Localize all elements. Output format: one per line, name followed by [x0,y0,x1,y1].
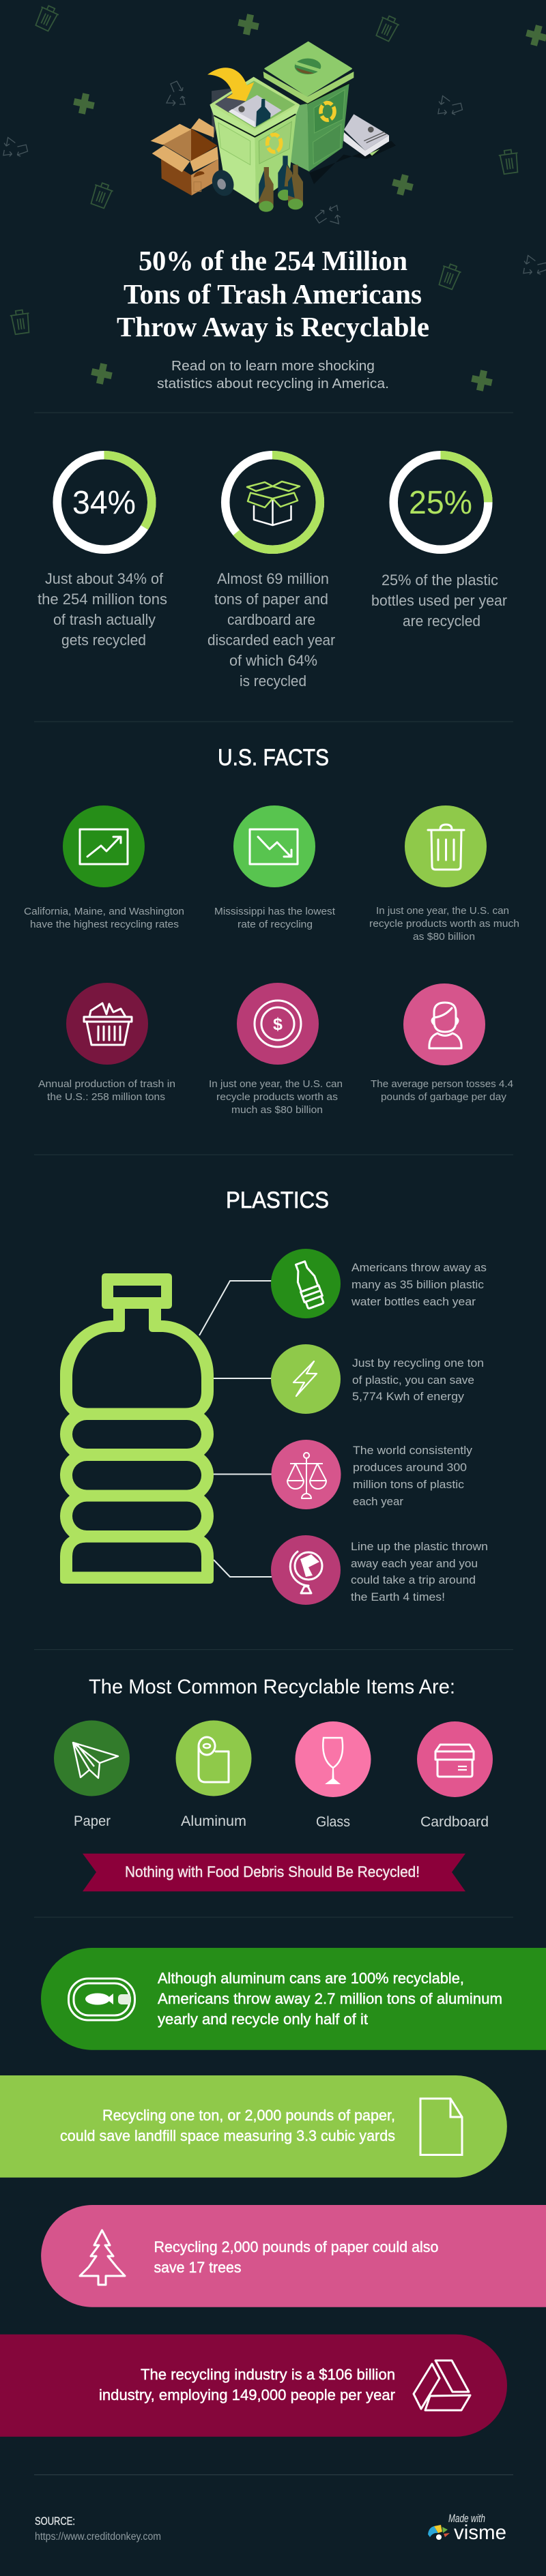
fact: coin [209,983,343,1116]
callout: world production: each year [353,1495,403,1508]
text: 34%: gets recycled [61,632,146,649]
subtitle: statistics about recycling in America. [157,376,389,391]
callout: world production: The world consistently [353,1444,473,1457]
fact: coin: $ [273,1015,283,1034]
item: aluminum [176,1720,251,1829]
callout: trip around the Earth: could take a trip around [351,1573,476,1586]
fact: annual production: Annual production of trash in [38,1078,175,1090]
callout: trip around the Earth [271,1535,488,1605]
icon: wheel [209,167,238,199]
fact: lowest rate: Mississippi has the lowest [214,906,336,917]
callout: world production: produces around 300 [353,1461,467,1474]
subtitle: Read on to learn more shocking [171,359,375,374]
fact: lowest rate: rate of recycling [238,919,313,930]
icon: triangle [414,2360,470,2410]
item: cardboard [417,1721,493,1830]
icon: document [420,2099,462,2155]
icon: front bin [210,77,300,203]
item: glass: Glass [316,1814,350,1830]
callout: energy: of plastic, you can save [352,1374,474,1387]
icon: bottles [259,156,303,212]
text: 64%: cardboard are [227,611,315,628]
text: 64%: Almost 69 million [217,570,329,587]
fact: person: pounds of garbage per day [381,1091,507,1103]
ring: 25%: 25% [409,485,472,521]
text: 34% [38,570,167,649]
callout: water bottles: water bottles each year [351,1295,476,1308]
source: SOURCE: [35,2515,75,2528]
fact: highest rates [24,805,184,930]
text: 25%: are recycled [403,612,480,630]
ring: 34%: 34% [72,485,136,521]
subtitle [157,359,389,391]
icon: back bin [263,42,354,172]
item: paper [54,1720,130,1829]
heading: U.S. facts: U.S. FACTS [218,745,329,771]
fact: trash can: recycle products worth as much [369,918,519,930]
text: 34%: the 254 million tons [38,591,167,608]
fact: annual production [38,983,175,1103]
text: 64% [207,570,335,690]
callout: world production [272,1440,473,1509]
banner: food debris warning: Nothing with Food Debris Should Be Recycled! [125,1863,420,1880]
icon: sardine can [68,1979,135,2020]
logo: made with visme: visme [454,2521,506,2544]
panel: recycling industry: The recycling industry is a $106 billion [141,2366,395,2383]
item: aluminum: Aluminum [181,1813,246,1829]
fact: person [371,983,513,1103]
fact: person: The average person tosses 4.4 [371,1078,513,1090]
item: paper: Paper [74,1813,111,1829]
title: Throw Away is Recyclable [117,311,429,342]
text: 64%: tons of paper and [214,591,328,608]
panel: aluminum cans: yearly and recycle only half of it [158,2011,368,2028]
fact: lowest rate [214,805,336,930]
connector lines [199,1281,272,1577]
title: 50% of the 254 Million [139,245,407,276]
callout: trip around the Earth: away each year and you [351,1557,478,1570]
icon: cardboard box [151,118,219,196]
source: https://www.creditdonkey.com [35,2531,161,2543]
logo: made with visme [428,2512,506,2544]
title: Tons of Trash Americans [124,278,422,310]
item: cardboard: Cardboard [420,1814,489,1830]
item: glass [295,1721,371,1830]
fact: annual production: the U.S.: 258 million tons [47,1091,165,1103]
fact: coin: recycle products worth as [216,1091,338,1103]
fact: highest rates: California, Maine, and Washington [24,906,184,917]
fact: trash can: as $80 billion [413,931,475,943]
logo: made with visme: Made with [448,2512,485,2525]
title [117,245,429,342]
fact: highest rates: have the highest recycling rates [30,919,179,930]
heading: common recyclable items: The Most Common Recyclable Items Are: [89,1676,455,1698]
callout: trip around the Earth: the Earth 4 times! [351,1590,445,1603]
panel: paper landfill [0,2075,507,2178]
fact: trash can [369,805,519,943]
panel: aluminum cans [41,1948,546,2050]
panel: recyclable items [54,1720,493,1830]
text: 34%: of trash actually [53,611,156,628]
panel: aluminum cans: Although aluminum cans are 100% recyclable, [158,1970,464,1987]
callout: water bottles [271,1249,487,1318]
icon: large bottle [60,1273,214,1584]
heading: plastics: PLASTICS [226,1187,329,1213]
fact: trash can: In just one year, the U.S. can [376,905,509,917]
panel: aluminum cans: Americans throw away 2.7 million tons of aluminum [158,1990,502,2007]
shadow [309,141,396,184]
fact: coin: In just one year, the U.S. can [209,1078,343,1090]
text: 25%: bottles used per year [371,592,507,609]
fact: coin: much as $80 billion [231,1104,323,1116]
callout: trip around the Earth: Line up the plastic thrown [351,1540,488,1553]
text: 25%: 25% of the plastic [382,572,498,589]
callout: energy: Just by recycling one ton [352,1357,484,1370]
callout: water bottles: many as 35 billion plastic [351,1278,485,1291]
ring: 64% with box icon [225,455,320,550]
text: 64%: is recycled [240,672,306,690]
panel: recycling industry [0,2335,507,2437]
panel: trees: save 17 trees [154,2259,242,2276]
icon: tree [80,2230,125,2285]
icon: paper stack [343,114,389,156]
text: 34%: Just about 34% of [45,570,164,587]
panel: trees [41,2205,546,2307]
text: 64%: of which 64% [229,652,317,669]
source [35,2515,161,2543]
callout: world production: million tons of plastic [353,1478,465,1491]
ring: 34% [57,455,152,550]
panel: recycling industry: industry, employing 149,000 people per year [99,2386,395,2403]
text: 64%: discarded each year [207,632,335,649]
callout: energy [271,1344,484,1414]
text: 25% [371,572,507,630]
hero illustration: recycling bins [151,42,396,212]
icon: yellow arrow [207,68,254,101]
panel: ring statistics [38,455,507,690]
background pattern: trash cans, crosses, recycle arrows [2,3,546,393]
callout: energy: 5,774 Kwh of energy [352,1390,465,1403]
panel: paper landfill: Recycling one ton, or 2,000 pounds of paper, [102,2107,395,2124]
panel: trees: Recycling 2,000 pounds of paper could also [154,2238,438,2255]
ring: 25% [394,455,488,550]
panel: paper landfill: could save landfill space measuring 3.3 cubic yards [60,2127,395,2144]
banner: food debris warning [83,1854,465,1891]
callout: water bottles: Americans throw away as [351,1261,487,1274]
panel: U.S. facts [24,805,519,1116]
chart: bottle diagram [60,1249,488,1605]
